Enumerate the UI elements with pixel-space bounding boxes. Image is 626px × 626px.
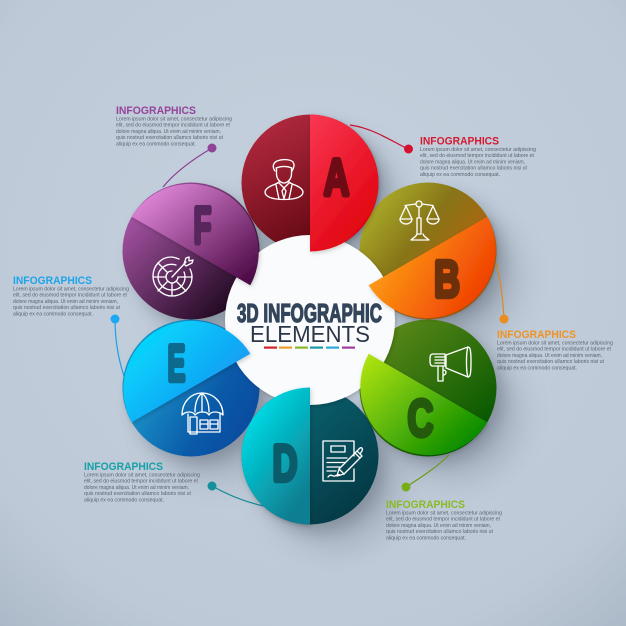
text block B [497, 329, 613, 371]
text block A: elit, sed do eiusmod tempor incididunt ut labore et [420, 153, 535, 159]
light segment A [310, 114, 378, 252]
icon: target with arrow [153, 257, 193, 296]
connector F [163, 144, 216, 187]
text block A: INFOGRAPHICS [420, 136, 499, 148]
text block D: dolore magna aliqua. Ut enim ad minim veniam, [84, 485, 189, 491]
text block F: INFOGRAPHICS [116, 105, 196, 117]
center white circle [225, 235, 395, 405]
letter C: C [408, 390, 434, 448]
letter B: B [434, 251, 460, 309]
text block F [116, 105, 232, 147]
text block A: Lorem ipsum dolor sit amet, consectetur adipiscing [420, 147, 536, 153]
letter F: F [194, 197, 212, 255]
text block B: INFOGRAPHICS [497, 329, 576, 341]
text block F: dolore magna aliqua. Ut enim ad minim veniam, [116, 129, 221, 135]
text block E: aliquip ex ea commodo consequat. [13, 311, 93, 317]
light segment C [360, 354, 487, 455]
text block B: quis nostrud exercitation ullamco laboris nisi ut [497, 359, 605, 365]
text block E: quis nostrud exercitation ullamco laboris nisi ut [13, 305, 121, 311]
dark discs [122, 114, 496, 524]
text block B: elit, sed do eiusmod tempor incididunt ut labore et [497, 347, 612, 353]
icon: megaphone [430, 347, 471, 381]
letter D: D [272, 435, 298, 493]
text block D: quis nostrud exercitation ullamco laboris nisi ut [84, 491, 192, 497]
text block D: Lorem ipsum dolor sit amet, consectetur adipiscing [84, 472, 200, 478]
letter A: A [324, 149, 350, 207]
connector C [402, 455, 449, 492]
text block C: INFOGRAPHICS [386, 499, 465, 511]
text block F: elit, sed do eiusmod tempor incididunt ut labore et [116, 123, 231, 129]
text block A: dolore magna aliqua. Ut enim ad minim veniam, [420, 159, 525, 165]
center title [237, 300, 382, 349]
text block E: dolore magna aliqua. Ut enim ad minim veniam, [13, 299, 118, 305]
text block E: elit, sed do eiusmod tempor incididunt ut labore et [13, 293, 128, 299]
text block E: Lorem ipsum dolor sit amet, consectetur adipiscing [13, 286, 129, 292]
icon: scales [400, 201, 439, 240]
text block C: dolore magna aliqua. Ut enim ad minim veniam, [386, 523, 491, 529]
ELEMENTS heading: ELEMENTS [250, 321, 370, 347]
letter E: E [168, 335, 186, 393]
text block C: Lorem ipsum dolor sit amet, consectetur adipiscing [386, 510, 502, 516]
text block A: quis nostrud exercitation ullamco laboris nisi ut [420, 166, 528, 172]
3D INFOGRAPHIC heading: 3D INFOGRAPHIC [237, 300, 382, 328]
text block C: elit, sed do eiusmod tempor incididunt ut labore et [386, 517, 501, 523]
text block A: aliquip ex ea commodo consequat. [420, 172, 500, 178]
text block D [84, 461, 200, 503]
text block C: aliquip ex ea commodo consequat. [386, 535, 466, 541]
text block D: aliquip ex ea commodo consequat. [84, 497, 164, 503]
text block E [13, 275, 129, 317]
long soft shadows [132, 124, 519, 547]
text block A [420, 136, 536, 178]
light segment E [123, 321, 250, 422]
text block B: aliquip ex ea commodo consequat. [497, 365, 577, 371]
connector E [110, 314, 124, 376]
text block F: Lorem ipsum dolor sit amet, consectetur adipiscing [116, 116, 232, 122]
text block C [386, 499, 502, 541]
text block D: INFOGRAPHICS [84, 461, 163, 473]
icon: document and pen [323, 441, 362, 481]
connector B [496, 263, 508, 324]
text block C: quis nostrud exercitation ullamco laboris nisi ut [386, 529, 494, 535]
colour bars [264, 346, 355, 349]
connector D [208, 482, 264, 506]
icon: businessman [265, 160, 303, 200]
text block D: elit, sed do eiusmod tempor incididunt ut labore et [84, 479, 199, 485]
light segment B [369, 217, 496, 318]
text block B: dolore magna aliqua. Ut enim ad minim veniam, [497, 353, 602, 359]
text block E: INFOGRAPHICS [13, 275, 92, 287]
connector A [350, 125, 413, 154]
text block F: quis nostrud exercitation ullamco laboris nisi ut [116, 135, 224, 141]
light segment D [242, 388, 310, 524]
text block B: Lorem ipsum dolor sit amet, consectetur adipiscing [497, 340, 613, 346]
text block F: aliquip ex ea commodo consequat. [116, 141, 196, 147]
light segment F [132, 184, 259, 285]
icon: house under umbrella [182, 393, 223, 434]
